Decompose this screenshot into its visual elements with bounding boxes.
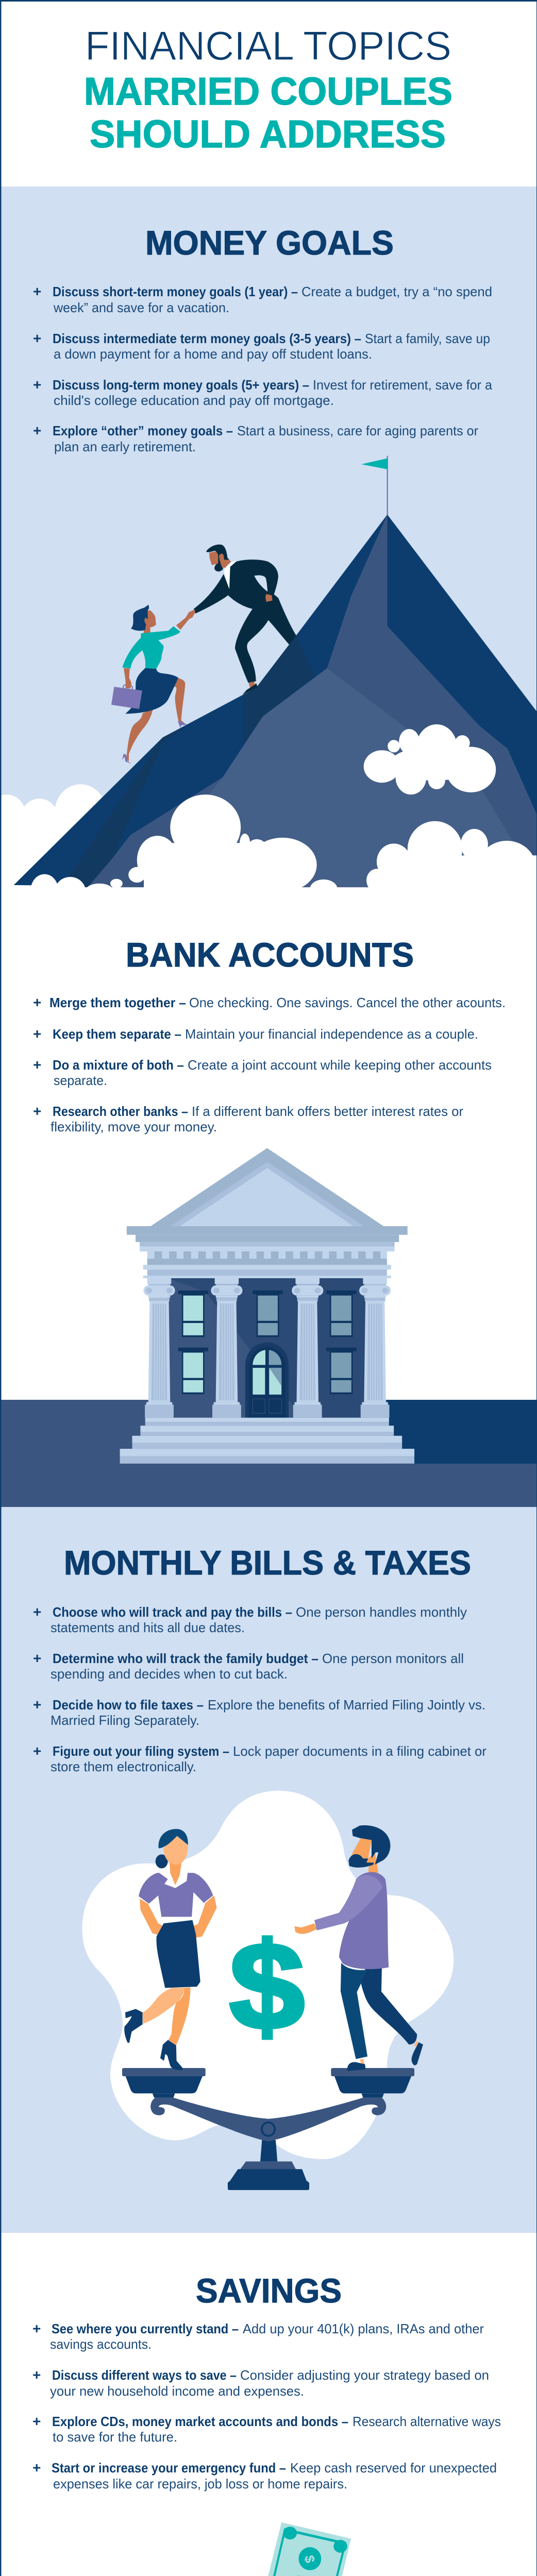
list item: other goals: Start a business, care for aging parents or (237, 423, 478, 438)
heading: bank accounts: BANK ACCOUNTS (126, 936, 414, 974)
list item: long-term goals (33, 377, 493, 408)
title line: Should Address: SHOULD ADDRESS (90, 112, 446, 156)
list item: ways to save: Consider adjusting your strategy based on (240, 2367, 489, 2383)
panel: money goals (0, 187, 537, 906)
list item: taxes: Explore the benefits of Married Filing Jointly vs. (208, 1697, 485, 1713)
list item: other goals: + (33, 422, 41, 438)
list item: current stand: savings accounts. (50, 2336, 152, 2352)
list item: emergency fund: + (32, 2460, 41, 2476)
list item: filing: Lock paper documents in a filing cabinet or (233, 1743, 486, 1759)
list item: taxes (33, 1697, 485, 1728)
list item: merge (33, 994, 506, 1010)
banknote top seal dollar: $ (301, 2554, 318, 2564)
illustration: white blob backdrop (82, 1791, 454, 2159)
list item: budget: Determine who will track the family budget – (53, 1651, 318, 1666)
figure: man on the scale (294, 1825, 423, 2071)
heading: monthly bills and taxes: MONTHLY BILLS & TAXES (64, 1544, 471, 1582)
list item: merge: Merge them together – (49, 995, 186, 1010)
list item: separate: Maintain your financial independence as a couple. (185, 1026, 478, 1042)
list item: other goals: Explore “other” money goals – (53, 423, 233, 438)
list item: CDs and bonds: Explore CDs, money market accounts and bonds – (52, 2414, 348, 2429)
list item: emergency fund: expenses like car repairs, job loss or home repairs. (53, 2476, 347, 2492)
list item: filing: + (33, 1743, 41, 1759)
title line: Married Couples: MARRIED COUPLES (84, 70, 452, 113)
list item: research: flexibility, move your money. (51, 1119, 217, 1134)
list item: intermediate goals: Start a family, save up (365, 331, 490, 346)
illustration: lockbox with rings (132, 2522, 451, 2576)
list item: other goals (33, 422, 478, 454)
panel: monthly bills and taxes (0, 1507, 537, 2233)
list item: research (33, 1103, 463, 1134)
list item: budget: spending and decides when to cut back. (51, 1666, 288, 1682)
list item: CDs and bonds (32, 2413, 501, 2445)
figure: man in suit (194, 545, 297, 687)
heading: savings: SAVINGS (196, 2272, 342, 2310)
list item: short-term goals: week” and save for a vacation. (53, 300, 229, 315)
list item: CDs and bonds: to save for the future. (53, 2429, 177, 2445)
list item: research: Research other banks – (53, 1104, 188, 1119)
list item: bills: One person handles monthly (296, 1604, 467, 1620)
figure: woman on the scale (124, 1829, 217, 2070)
panel: title header (0, 0, 537, 187)
bank steps (120, 1418, 414, 1464)
illustration: climbing couple (111, 545, 297, 764)
list item: current stand (32, 2320, 484, 2352)
heading: money goals: MONEY GOALS (145, 224, 394, 262)
illustration: back-left clouds (0, 784, 111, 899)
panel: bank accounts (0, 902, 537, 1508)
list item: ways to save: your new household income and expenses. (50, 2383, 304, 2399)
list item: budget: One person monitors all (322, 1651, 464, 1666)
list item: bills (33, 1604, 467, 1635)
illustration: balance scale (122, 2068, 414, 2190)
list item: filing: store them electronically. (51, 1759, 196, 1774)
list item: taxes: Decide how to file taxes – (53, 1697, 204, 1713)
list item: current stand: Add up your 401(k) plans, IRAs and other (243, 2321, 484, 2336)
list item: ways to save: + (32, 2367, 41, 2383)
list item: intermediate goals: + (33, 330, 41, 346)
list item: long-term goals: Discuss long-term money goals (5+ years) – (53, 377, 309, 393)
list item: budget: + (33, 1650, 41, 1666)
list item: other goals: plan an early retirement. (54, 439, 196, 454)
illustration: foreground clouds (0, 724, 537, 906)
list item: filing (33, 1743, 486, 1774)
list item: filing: Figure out your filing system – (53, 1743, 229, 1759)
list item: taxes: + (33, 1697, 41, 1713)
list item: short-term goals: + (33, 283, 41, 299)
list item: intermediate goals: Discuss intermediate term money goals (3-5 years) – (53, 331, 361, 346)
banknote (246, 2522, 351, 2576)
list item: current stand: + (32, 2320, 41, 2336)
list item: CDs and bonds: Research alternative ways (353, 2414, 501, 2429)
list item: emergency fund: Keep cash reserved for unexpected (290, 2460, 497, 2476)
list item: research: + (33, 1103, 41, 1119)
list item: mixture: + (33, 1057, 41, 1073)
list item: merge: One checking. One savings. Cancel the other acounts. (189, 995, 506, 1010)
list item: separate: Keep them separate – (53, 1026, 181, 1042)
scale beam and pans (122, 2068, 414, 2157)
list item: separate (33, 1026, 478, 1042)
list item: research: If a different bank offers better interest rates or (192, 1104, 463, 1119)
list item: separate: + (33, 1026, 41, 1042)
list item: bills: Choose who will track and pay the bills – (53, 1604, 292, 1620)
list item: ways to save: Discuss different ways to save – (52, 2367, 237, 2383)
list item: mixture (33, 1057, 492, 1088)
icon: summit flag (361, 456, 388, 515)
illustration: bank ground (0, 1400, 537, 1508)
icon: dollar sign: $ (229, 1917, 305, 2055)
list item: mixture: separate. (54, 1073, 107, 1088)
cloud: on the mountain face (364, 724, 496, 794)
list item: merge: + (33, 994, 41, 1010)
panel: savings (0, 2233, 537, 2576)
list item: mixture: Create a joint account while keeping other accounts (188, 1057, 492, 1073)
list item: mixture: Do a mixture of both – (53, 1057, 184, 1073)
list item: long-term goals: child's college education and pay off mortgage. (54, 393, 334, 408)
cloud: bottom right (366, 821, 537, 895)
figure: woman with briefcase (111, 605, 195, 764)
list item: taxes: Married Filing Separately. (51, 1713, 199, 1728)
list item: bills: + (33, 1604, 41, 1620)
bank columns (143, 1278, 391, 1418)
list item: budget (33, 1650, 464, 1682)
cloud: bottom left (31, 794, 338, 906)
list item: emergency fund (32, 2460, 497, 2492)
list item: ways to save (32, 2367, 489, 2399)
list item: CDs and bonds: + (32, 2413, 41, 2429)
list item: intermediate goals: a down payment for a home and pay off student loans. (54, 346, 372, 362)
list item: current stand: See where you currently stand – (52, 2321, 239, 2336)
title line: Financial Topics: FINANCIAL TOPICS (85, 23, 451, 69)
bank door (245, 1343, 289, 1418)
illustration: mountain and flag (14, 456, 537, 890)
bank wall (168, 1278, 366, 1418)
list item: long-term goals: Invest for retirement, save for a (313, 377, 493, 393)
list item: short-term goals: Create a budget, try a “no spend (301, 284, 492, 299)
list item: short-term goals (33, 283, 492, 315)
list item: short-term goals: Discuss short-term money goals (1 year) – (53, 284, 298, 299)
scale base (228, 2140, 309, 2190)
list item: intermediate goals (33, 330, 490, 362)
list item: long-term goals: + (33, 377, 41, 393)
illustration: bank building (120, 1148, 414, 1464)
bank roof (127, 1148, 408, 1278)
list item: bills: statements and hits all due dates. (51, 1620, 245, 1635)
bank windows (178, 1291, 357, 1394)
list item: emergency fund: Start or increase your emergency fund – (52, 2460, 286, 2476)
